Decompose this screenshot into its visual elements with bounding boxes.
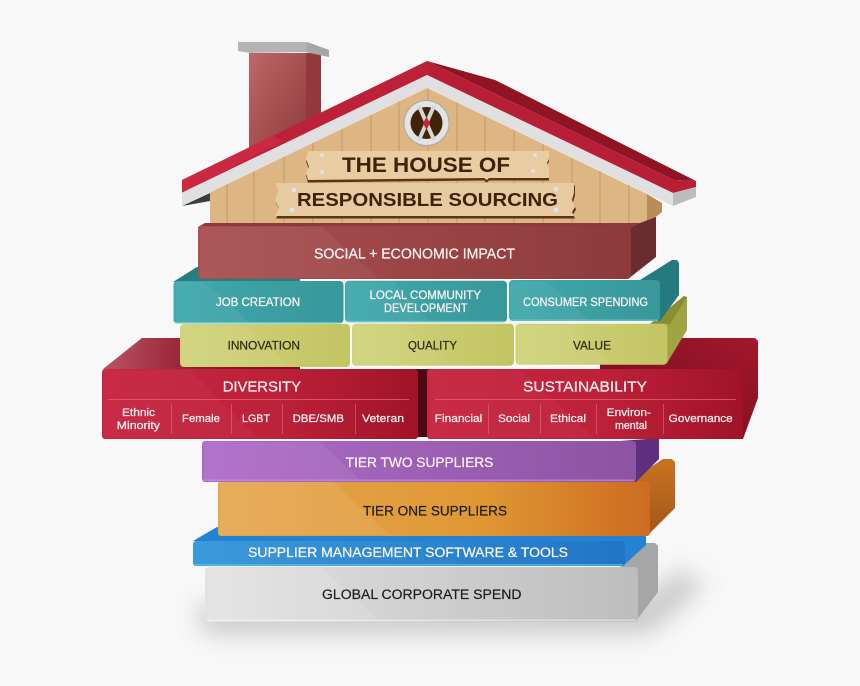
heading: DIVERSITY <box>223 378 301 396</box>
labels <box>216 290 648 315</box>
label: GLOBAL CORPORATE SPEND <box>322 587 522 602</box>
layer: global corporate spend <box>205 543 658 622</box>
back slope <box>427 61 696 181</box>
items: Female <box>182 413 220 425</box>
sign text: THE HOUSE OF <box>342 153 510 177</box>
layer: innovation quality value <box>180 296 687 367</box>
layer: social and economic impact <box>198 217 656 279</box>
labels: CONSUMER SPENDING <box>523 297 648 309</box>
back and side <box>173 267 300 282</box>
items: Financial <box>435 413 482 425</box>
items: Ethnic <box>122 407 156 419</box>
back and side <box>600 338 758 439</box>
label: SUPPLIER MANAGEMENT SOFTWARE & TOOLS <box>248 545 568 560</box>
items: Environ- <box>607 407 651 419</box>
icon: round window <box>404 100 449 146</box>
label: TIER TWO SUPPLIERS <box>346 455 493 470</box>
white fascia <box>182 75 673 206</box>
items: Governance <box>669 413 733 425</box>
labels: VALUE <box>573 340 611 352</box>
layer: sustainability <box>427 338 758 439</box>
labels: DEVELOPMENT <box>384 303 468 315</box>
labels <box>228 340 611 352</box>
house wall <box>182 88 662 224</box>
layer: tier two suppliers <box>202 438 659 482</box>
chimney <box>238 42 329 153</box>
side <box>650 296 687 363</box>
label: SOCIAL + ECONOMIC IMPACT <box>314 246 515 262</box>
front slope <box>182 61 427 193</box>
roof <box>182 61 696 206</box>
label: TIER ONE SUPPLIERS <box>363 504 507 518</box>
sign text: RESPONSIBLE SOURCING <box>297 190 558 210</box>
items: Social <box>498 413 530 425</box>
items <box>435 407 733 432</box>
items: Veteran <box>362 413 404 425</box>
labels: QUALITY <box>408 340 457 352</box>
items: mental <box>615 420 647 432</box>
labels: INNOVATION <box>228 340 300 352</box>
layer: supplier management software <box>193 527 646 566</box>
labels: JOB CREATION <box>216 297 300 309</box>
layer: job creation community consumer <box>173 260 679 324</box>
layer: tier one suppliers <box>218 459 675 536</box>
sign: responsible sourcing <box>275 183 576 218</box>
sign: the house of <box>306 151 549 182</box>
items <box>117 407 404 432</box>
heading: SUSTAINABILITY <box>523 378 647 396</box>
layer: diversity <box>102 338 430 439</box>
planks <box>227 88 629 224</box>
back top <box>103 338 300 369</box>
items: Minority <box>117 420 161 432</box>
ground shadow <box>195 570 705 634</box>
labels: LOCAL COMMUNITY <box>370 290 481 302</box>
items: DBE/SMB <box>293 413 344 425</box>
items: LGBT <box>242 413 270 425</box>
items: Ethical <box>550 413 586 425</box>
